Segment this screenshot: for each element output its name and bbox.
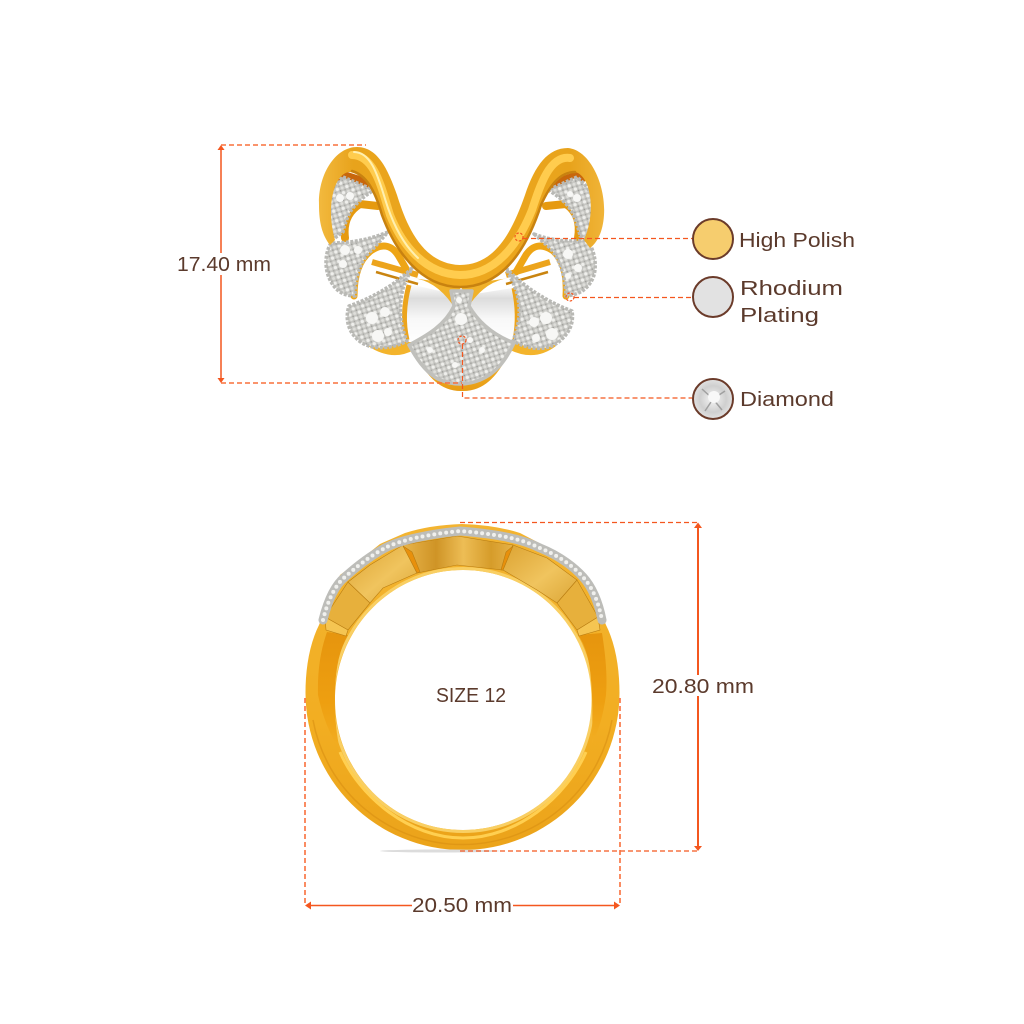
ring size label: SIZE 12 bbox=[436, 685, 506, 707]
left side recess bbox=[318, 632, 348, 750]
diamond strip bbox=[323, 531, 602, 620]
legend: high polish bbox=[693, 219, 855, 259]
label: 17.40 mm: 17.40 mm bbox=[177, 254, 271, 276]
diamond fan: mid right bbox=[534, 234, 595, 296]
main wavy gold band with crescents bbox=[319, 147, 604, 287]
larger bright stones bbox=[336, 191, 582, 368]
diamond fan: inner left bbox=[347, 268, 412, 348]
height dimension: 17.40 mm bbox=[177, 145, 462, 383]
ground shadow under ring bbox=[380, 850, 500, 852]
band shading and highlights bbox=[352, 152, 575, 287]
legend: high polish: High Polish bbox=[739, 230, 855, 252]
gold facets bbox=[325, 536, 600, 636]
diamond fan: mid left bbox=[326, 232, 388, 296]
diamond fan: far right bbox=[548, 177, 596, 240]
right side recess bbox=[578, 633, 606, 743]
legend: rhodium plating bbox=[693, 277, 843, 327]
central windows with soft shadow bbox=[404, 278, 518, 342]
gold base under the diamond fans bbox=[368, 325, 556, 391]
height dimension: 20.80 mm bbox=[460, 522, 754, 851]
legend: diamond: Diamond bbox=[740, 389, 834, 411]
ring body bbox=[306, 524, 620, 850]
leader line: high polish bbox=[515, 233, 692, 241]
diamond fan: centre bbox=[409, 291, 514, 384]
diamond fan: inner right bbox=[506, 268, 573, 348]
legend: diamond bbox=[693, 379, 834, 419]
rear shank bars bbox=[372, 262, 550, 284]
inner rim and band highlights bbox=[313, 568, 612, 845]
diamond fan: far left bbox=[326, 177, 374, 240]
leader line: diamond bbox=[458, 336, 692, 398]
inner gold loops bbox=[340, 176, 582, 296]
top-view ring illustration bbox=[319, 147, 604, 391]
width dimension: 20.50 mm bbox=[305, 698, 620, 917]
legend: rhodium plating: Plating bbox=[740, 305, 819, 327]
label: 20.80 mm: 20.80 mm bbox=[652, 676, 754, 698]
side-view ring illustration bbox=[306, 524, 620, 850]
leader line: rhodium plating bbox=[566, 293, 692, 301]
label: 20.50 mm: 20.50 mm bbox=[412, 895, 512, 917]
legend: rhodium plating: Rhodium bbox=[740, 278, 843, 300]
